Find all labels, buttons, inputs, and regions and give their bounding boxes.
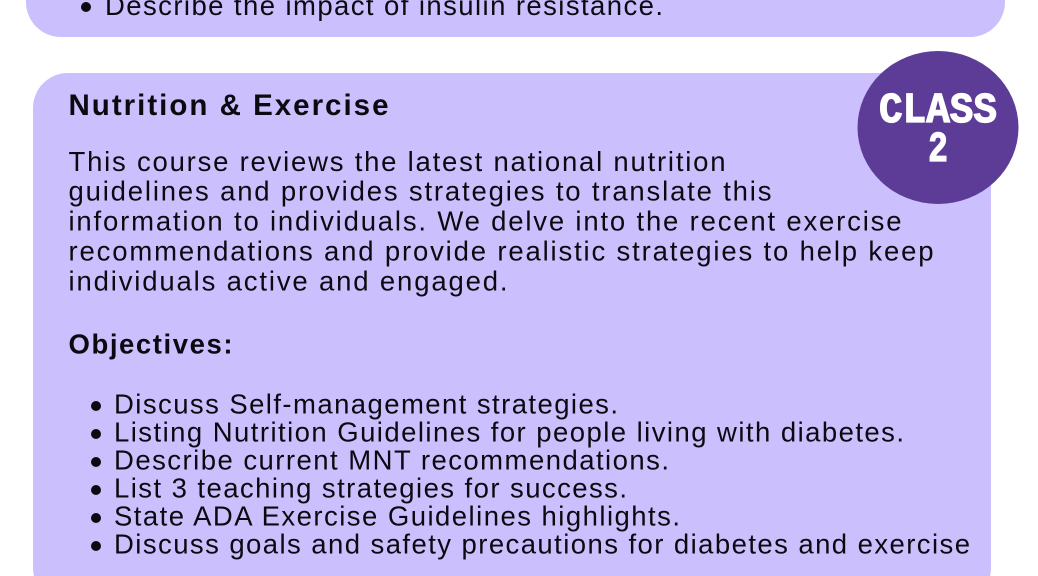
heading: Nutrition & Exercise [68,89,388,122]
objectives list: State ADA Exercise Guidelines highlights. [114,500,680,532]
course description: recommendations and provide realistic strategies to help keep [68,236,933,266]
course description [68,146,933,296]
objectives list [91,388,970,560]
badge: class 2 [858,51,1018,204]
objectives list: Discuss Self-management strategies. [114,388,618,420]
course description: guidelines and provides strategies to translate this [68,176,772,206]
objectives heading: Objectives: [68,328,232,360]
objectives list: Listing Nutrition Guidelines for people living with diabetes. [114,416,904,448]
objectives list: List 3 teaching strategies for success. [114,472,627,504]
course description: This course reviews the latest national nutrition [68,146,726,177]
course description: information to individuals. We delve into the recent exercise [68,206,901,236]
objectives list: Discuss goals and safety precautions for diabetes and exercise [114,528,970,560]
objectives list: Describe current MNT recommendations. [114,444,669,476]
course description: individuals active and engaged. [68,266,508,296]
badge: class 2: 2 [928,125,948,174]
badge: class 2: CLASS [879,86,997,135]
panel: previous class (cropped) [26,0,1005,37]
